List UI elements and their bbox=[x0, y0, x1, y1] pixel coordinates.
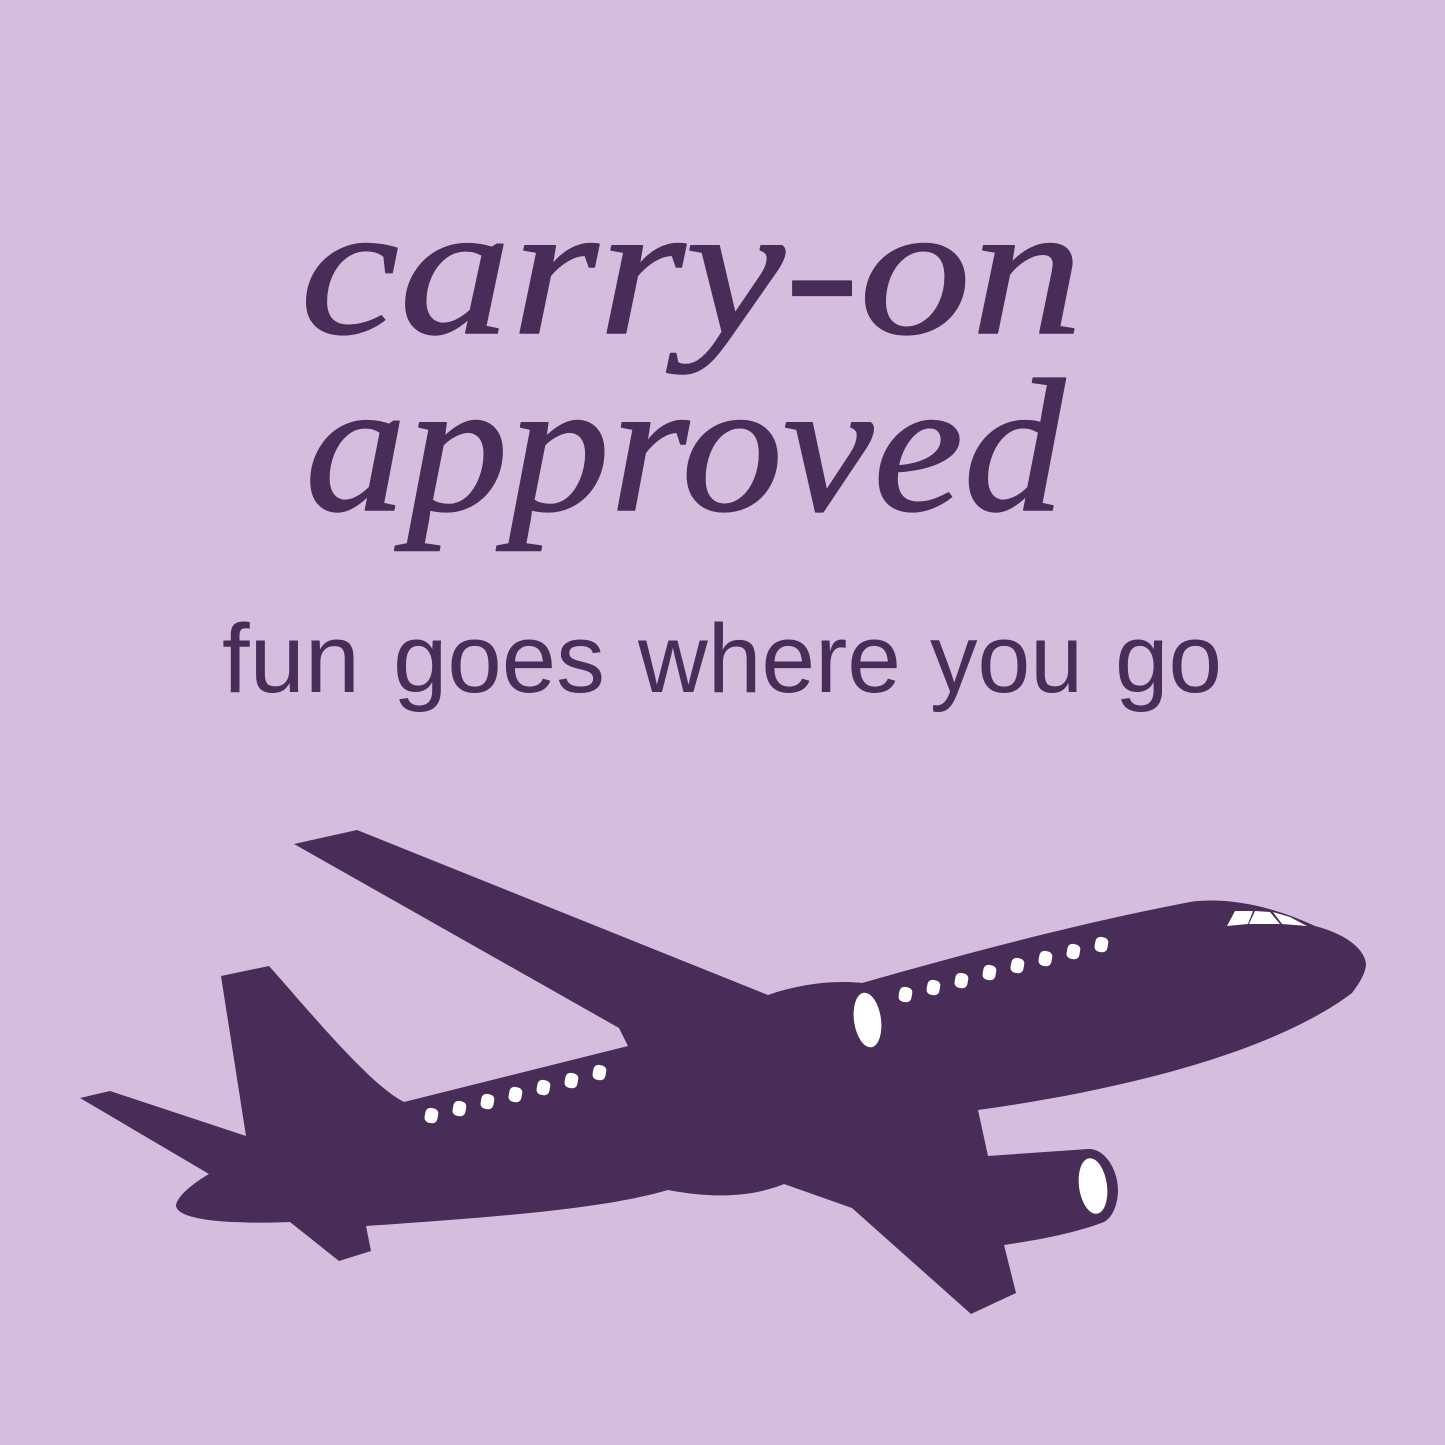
airplane silhouette bbox=[80, 830, 1366, 1314]
engine inlets bbox=[850, 991, 1111, 1216]
subtitle bbox=[222, 604, 1222, 713]
subtitle: you bbox=[930, 604, 1083, 713]
title line: carry-on: carry-on bbox=[300, 165, 1083, 375]
cockpit windows bbox=[1227, 911, 1307, 926]
subtitle: go bbox=[1115, 604, 1222, 713]
subtitle: goes bbox=[393, 604, 605, 713]
cabin windows bbox=[424, 936, 1109, 1124]
title line: approved: approved bbox=[305, 342, 1066, 552]
subtitle: where bbox=[637, 604, 901, 713]
title bbox=[300, 165, 1083, 552]
icon: airplane bbox=[80, 830, 1366, 1314]
subtitle: fun bbox=[222, 604, 360, 713]
